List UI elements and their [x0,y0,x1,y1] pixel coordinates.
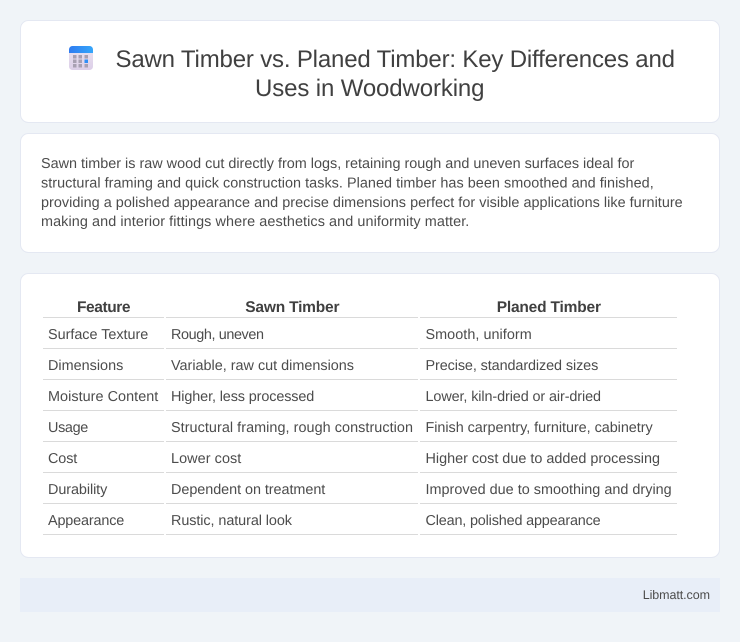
icon: calendar [69,46,93,70]
row: surface texture: Surface Texture [48,327,148,343]
table header: Feature [77,299,131,316]
row: cost: Cost [48,451,77,467]
row: durability: Dependent on treatment [171,482,325,498]
text block: introduction: Sawn timber is raw wood cut directly from logs, retaining rough and uneven surfaces ideal for [41,156,635,172]
row: dimensions: Precise, standardized sizes [426,358,598,374]
panel: introduction [20,134,720,252]
row: cost [48,451,660,467]
row: usage: Usage [48,420,88,436]
table grid lines [43,318,677,534]
table header: Planed Timber [497,299,601,316]
title [116,46,675,102]
title: Sawn Timber vs. Planed Timber: Key Differences and [116,46,675,73]
row: appearance: Clean, polished appearance [426,513,601,529]
row: usage: Finish carpentry, furniture, cabinetry [426,420,653,436]
footer credit: Libmatt.com [643,588,710,602]
panel: comparison table [20,274,720,558]
text block: introduction [41,156,683,230]
row: moisture content: Higher, less processed [171,389,314,405]
row: dimensions: Dimensions [48,358,123,374]
row: durability [48,482,672,498]
table header: Sawn Timber [245,299,340,316]
row: moisture content: Lower, kiln-dried or air-dried [426,389,601,405]
row: appearance [48,513,601,529]
row: cost: Higher cost due to added processing [426,451,660,467]
row: appearance: Rustic, natural look [171,513,293,529]
row: durability: Improved due to smoothing and drying [426,482,672,498]
row: surface texture: Smooth, uniform [426,327,532,343]
text block: introduction: structural framing and quick construction tasks. Planed timber has been smoothed and finished, [41,176,654,192]
row: surface texture: Rough, uneven [171,327,264,343]
row: appearance: Appearance [48,513,124,529]
row: moisture content: Moisture Content [48,389,158,405]
text block: introduction: providing a polished appearance and precise dimensions perfect for visible applications like furniture [41,195,683,211]
row: durability: Durability [48,482,108,498]
row: usage: Structural framing, rough construction [171,420,413,436]
row: moisture content [48,389,601,405]
title: Uses in Woodworking [255,75,484,102]
text block: introduction: making and interior fittings where aesthetics and uniformity matter. [41,214,469,230]
row: usage [48,420,653,436]
footer [20,578,720,612]
row: dimensions [48,358,598,374]
table header [77,299,601,316]
row: surface texture [48,327,532,343]
panel: header [20,20,720,122]
row: dimensions: Variable, raw cut dimensions [171,358,354,374]
row: cost: Lower cost [171,451,241,467]
